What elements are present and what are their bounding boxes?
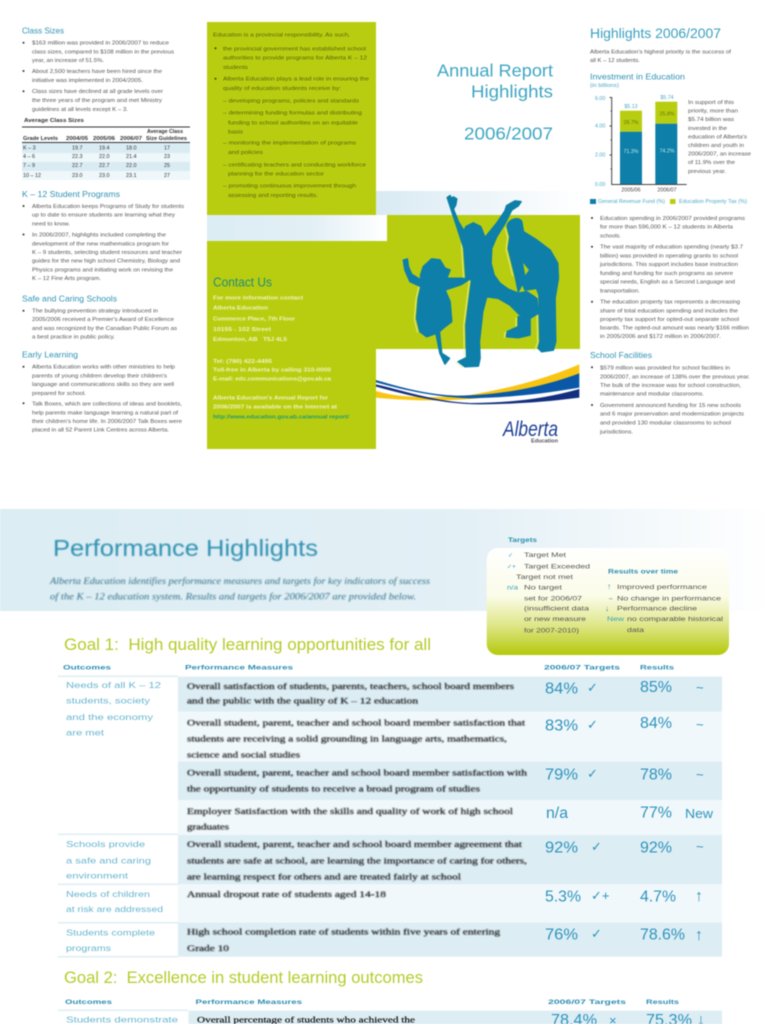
outcomes column: [66, 680, 163, 953]
panel: green responsibility box: basis: [228, 130, 243, 136]
text block: contact details: Alberta Education's Annual Report for: [213, 395, 328, 401]
text block: italic intro: Alberta Education identifies performance measures and targets for key indicators of success: [49, 576, 430, 587]
text block: class sizes bullets: About 2,500 teachers have been hired since the: [32, 69, 162, 75]
panel: green responsibility box: – promoting continuous improvement through: [223, 184, 356, 190]
title: Annual Report Highlights: 2006/2007: [464, 124, 553, 144]
panel: green responsibility box: students: [223, 65, 248, 71]
legend: targets and results over time: n/a: [507, 584, 519, 591]
targets and results values: ✓: [587, 766, 598, 781]
text block: chart commentary: 2006/2007, an increase: [688, 152, 751, 158]
text block: student programs bullets: Alberta Education keeps Programs of Study for students: [32, 204, 184, 210]
targets and results values: ↑: [695, 927, 703, 944]
heading: Goal 2: Goal 2: Excellence in student learning outcomes: [64, 968, 423, 987]
text block: class sizes bullets: Class sizes have declined at all grade levels over: [32, 89, 163, 95]
bar chart: investment in education: General Revenue Fund (%): [598, 199, 665, 205]
outcomes column: Schools provide: [66, 839, 145, 849]
illustration: swoosh: [376, 364, 579, 404]
table: goal 2 performance: Outcomes: [65, 999, 112, 1006]
text block: intro: Alberta Education's highest priority is the success of: [590, 50, 731, 56]
text block: spending bullets: funding and funding for such programs as severe: [600, 271, 733, 277]
outcomes column: at risk are addressed: [66, 904, 163, 914]
text block: contact details: 10155 - 102 Street: [213, 327, 271, 333]
measures column: Overall student, parent, teacher and school board member satisfaction with: [187, 768, 528, 778]
targets and results values: 84%: [640, 715, 672, 732]
legend: targets and results over time: data: [627, 627, 645, 634]
table: average class sizes: 22.7: [99, 163, 110, 169]
table: goal 1 performance: Outcomes: [63, 664, 111, 672]
table: goal 1 performance: Performance Measures: [185, 664, 293, 672]
text block: class sizes bullets: [22, 40, 174, 113]
text block: early learning bullets: their children's home life. In 2006/2007 Talk Boxes were: [32, 419, 182, 425]
table: average class sizes: 21.4: [126, 154, 136, 160]
text block: class sizes bullets: $163 million was provided in 2006/2007 to reduce: [32, 40, 169, 46]
title: Annual Report Highlights: Highlights: [471, 82, 553, 102]
panel: green responsibility box: funding to school authorities on an equitable: [228, 120, 358, 126]
text block: spending bullets: boards. The opted-out amount was nearly $166 million: [600, 326, 749, 332]
text block: spending bullets: share of total education spending and includes the: [600, 309, 738, 315]
text block: chart commentary: priority, more than: [688, 109, 738, 115]
bar chart: investment in education: (in billions): [590, 83, 619, 89]
measures column: Grade 10: [187, 943, 229, 953]
legend: targets and results over time: ↑: [607, 582, 611, 591]
legend: targets and results over time: set for 2006/07: [524, 595, 583, 602]
text block: spending bullets: for more than 596,000 K – 12 students in Alberta: [600, 224, 734, 230]
text block: safe schools bullet: a best practice in public policy.: [32, 334, 115, 340]
targets and results values: ~: [696, 839, 704, 854]
panel: green responsibility box: planning for the education sector: [228, 172, 324, 178]
outcomes column: a safe and caring: [66, 856, 151, 866]
measures column: Annual dropout rate of students aged 14-18: [187, 889, 386, 899]
measures column: graduates: [187, 822, 230, 832]
targets and results values: ✓: [591, 839, 602, 854]
text block: class sizes bullets: year, an increase of 51.5%.: [32, 58, 104, 64]
measures column: Overall student, parent, teacher and school board member satisfaction that: [187, 718, 526, 728]
targets and results values: 78%: [640, 766, 672, 784]
targets and results values: 79%: [545, 766, 578, 784]
targets and results values: ✓: [587, 680, 598, 695]
text block: class sizes bullets: the three years of the program and met Ministry: [32, 98, 162, 104]
legend: targets and results over time: Target Exceeded: [524, 564, 591, 571]
targets and results values: 4.7%: [640, 888, 676, 906]
table: average class sizes: 23.1: [126, 173, 136, 179]
table: average class sizes: 2004/05: [66, 136, 88, 142]
text block: school facilities bullets: maintenance and modular classrooms.: [600, 392, 704, 398]
text block: class sizes bullets: guidelines at all levels except K – 3.: [32, 107, 128, 113]
table: average class sizes: Grade Levels: [23, 136, 58, 142]
table: average class sizes: 18.0: [126, 146, 136, 152]
legend: targets and results over time: Targets: [508, 537, 538, 544]
legend: targets and results over time: –: [609, 596, 613, 603]
outcomes column: are met: [66, 727, 105, 737]
title: Annual Report Highlights: [437, 60, 553, 144]
measures column: students are receiving a solid grounding in language arts, mathematics,: [187, 733, 507, 743]
table: average class sizes: 27: [164, 173, 170, 179]
table: goal 1 performance: [58, 664, 722, 958]
outcomes column: Students complete: [66, 928, 155, 938]
table: goal 1 performance: 2006/07 Targets: [544, 664, 621, 672]
bar chart: investment in education: 6.00: [595, 96, 605, 102]
legend: targets and results over time: No change in performance: [617, 596, 722, 603]
bar chart: investment in education: Education Property Tax (%): [679, 199, 747, 205]
text block: spending bullets: billion) was provided in operating grants to school: [600, 254, 738, 260]
bar chart: investment in education: 4.00: [595, 124, 605, 130]
targets and results values: 92%: [545, 840, 578, 856]
targets and results values: ✓+: [591, 888, 609, 903]
legend: targets and results over time: Target Met: [524, 552, 566, 559]
panel: green responsibility box: [207, 22, 376, 215]
title: Annual Report Highlights: Annual Report: [437, 60, 553, 80]
bar chart: investment in education: [590, 83, 747, 205]
text block: intro: [590, 50, 731, 64]
table: average class sizes: 19.4: [99, 146, 110, 152]
panel: green responsibility box: the provincial government has established school: [223, 46, 366, 52]
text block: intro: all K – 12 students.: [590, 58, 640, 64]
text block: school facilities bullets: Government announced funding for 15 new schools: [600, 403, 741, 409]
text block: contact details: Alberta Education: [213, 306, 268, 312]
text block: contact details: Tel: (780) 422-4495: [213, 359, 272, 365]
text block: chart commentary: invested in the: [688, 126, 727, 132]
table: goal 2 performance: 2006/07 Targets: [548, 999, 627, 1006]
table: average class sizes: 2005/06: [93, 136, 115, 142]
outcomes column: Needs of all K – 12: [66, 680, 161, 690]
bar chart: investment in education: $5.74: [660, 95, 674, 101]
text block: student programs bullets: In 2006/2007, highlights included completing the: [32, 232, 166, 238]
text block: class sizes bullets: class sizes, compared to $108 million in the previous: [32, 50, 174, 56]
measures column: and the public with the quality of K – 12 education: [187, 696, 419, 706]
panel: green responsibility box: – certificating teachers and conducting workforce: [223, 162, 366, 168]
targets and results values: [545, 679, 714, 944]
text block: spending bullets: The vast majority of education spending (nearly $3.7: [600, 245, 743, 251]
text block: early learning bullets: Talk Boxes, which are collections of ideas and booklets,: [32, 401, 182, 407]
table: average class sizes: 2006/07: [120, 136, 142, 142]
text block: safe schools bullet: [22, 309, 177, 340]
text block: safe schools bullet: 2005/2006 received a Premier's Award of Excellence: [32, 317, 174, 323]
text block: italic intro: of the K – 12 education system. Results and targets for 2006/2007 are provided below.: [50, 592, 416, 602]
panel: green responsibility box: – determining funding formulas and distributing: [223, 111, 362, 117]
targets and results values: 77%: [640, 804, 672, 822]
text block: early learning bullets: help parents make language learning a natural part of: [32, 410, 178, 416]
outcomes column: environment: [66, 871, 129, 881]
legend: targets and results over time: New: [607, 616, 625, 623]
legend: targets and results over time: or new measure: [524, 616, 587, 623]
text block: early learning bullets: placed in all 52 Parent Link Centres across Alberta.: [32, 428, 169, 434]
table: average class sizes: 10 – 12: [23, 173, 41, 179]
text block: early learning bullets: Alberta Education works with other ministries to help: [32, 365, 175, 371]
legend: targets and results over time: ✓: [508, 552, 513, 559]
measures column: Overall satisfaction of students, parents, teachers, school board members: [187, 681, 515, 691]
legend: targets and results over time: (insufficient data: [524, 606, 590, 613]
bar chart: investment in education: 2005/06: [621, 187, 641, 193]
table: goal 2 performance: Performance Measures: [196, 999, 302, 1006]
heading: Highlights 2006/2007: Highlights 2006/2007: [590, 25, 721, 41]
text block: contact details: [213, 295, 350, 420]
heading: Performance Highlights: Performance Highlights: [53, 535, 318, 561]
text block: spending bullets: in 2005/2006 and $172 million in 2006/2007.: [600, 334, 721, 340]
panel: performance highlights header band: [0, 509, 768, 611]
text block: early learning bullets: prepared for school.: [32, 391, 86, 397]
text block: school facilities bullets: $579 million was provided for school facilities in: [600, 365, 730, 371]
text block: chart commentary: In support of this: [688, 100, 734, 106]
targets and results values: New: [685, 806, 714, 821]
targets and results values: ~: [696, 767, 704, 782]
text block: contact details: E-mail: edc.communications@gov.ab.ca: [213, 377, 331, 383]
panel: green responsibility box: quality of education students receive by:: [223, 86, 341, 92]
table: average class sizes: K – 3: [23, 146, 36, 152]
text block: chart commentary: children and youth in: [688, 143, 744, 149]
text block: school facilities bullets: The bulk of the increase was for school construction,: [600, 383, 741, 389]
table: average class sizes: 17: [164, 146, 170, 152]
text block: spending bullets: [591, 216, 749, 340]
text block: school facilities bullets: jurisdictions.: [599, 429, 633, 435]
text block: student programs bullets: [22, 204, 184, 282]
panel: green responsibility box: Education is a provincial responsibility. As such,: [213, 32, 350, 38]
text block: contact details: Commerce Place, 7th Floor: [213, 317, 295, 323]
panel: green responsibility box: Alberta Education plays a lead role in ensuring the: [223, 77, 369, 83]
targets and results values: 78.6%: [640, 926, 685, 944]
targets and results values: 5.3%: [545, 888, 581, 906]
text block: early learning bullets: parents of young children develop their children's: [32, 373, 167, 379]
legend: targets and results over time: ✓+: [507, 564, 516, 571]
text block: school facilities bullets: [591, 365, 750, 435]
text block: spending bullets: special needs, English as a Second Language and: [600, 279, 735, 285]
measures column: High school completion rate of students within five years of entering: [187, 927, 501, 937]
legend: targets and results over time: Results over time: [608, 569, 679, 576]
heading: Class Sizes: Class Sizes: [22, 26, 64, 36]
text block: contact details: Toll-free in Alberta by calling 310-0000: [213, 367, 331, 373]
targets and results values: n/a: [546, 805, 568, 822]
text block: spending bullets: property tax support for opted-out separate school: [600, 317, 739, 323]
text block: safe schools bullet: and was recognized by the Canadian Public Forum as: [32, 326, 177, 332]
legend: targets and results over time: No target: [524, 584, 562, 591]
text block: student programs bullets: K – 12 Fine Arts program.: [32, 276, 101, 282]
panel: green responsibility box: – monitoring the implementation of programs: [223, 141, 356, 147]
table: average class sizes: Average Class Sizes: [24, 118, 84, 124]
table: average class sizes: 19.7: [72, 146, 82, 152]
table: average class sizes: 7 – 9: [23, 163, 35, 169]
outcomes column: programs: [66, 943, 111, 953]
text block: school facilities bullets: and provided 130 modular classrooms to school: [600, 420, 731, 426]
targets and results values: 92%: [640, 840, 672, 856]
text block: early learning bullets: language and communications skills so they are well: [32, 382, 174, 388]
panel: green responsibility box: assessing and reporting results.: [228, 193, 318, 199]
measures column: are learning respect for others and are treated fairly at school: [187, 872, 462, 882]
panel: green responsibility box: authorities to provide programs for Alberta K – 12: [223, 56, 367, 62]
heading: Safe and Caring Schools: Safe and Caring Schools: [22, 294, 117, 304]
legend: targets and results over time: no comparable historical: [627, 616, 723, 623]
table: goal 2 performance: [58, 999, 722, 1024]
text block: contact details: For more information contact: [213, 295, 303, 301]
text block: chart commentary: [688, 100, 751, 175]
measures column: students are safe at school, are learning the importance of caring for others,: [187, 856, 527, 866]
text block: contact details: Edmonton, AB T5J 4L5: [213, 337, 287, 343]
bar chart: investment in education: 74.2%: [659, 148, 675, 154]
heading: Goal 1: Goal 1: High quality learning opportunities for all: [64, 635, 431, 654]
legend: targets and results over time: Improved performance: [617, 584, 708, 591]
table: average class sizes: [22, 118, 190, 180]
heading: K-12 Student Programs: K – 12 Student Programs: [22, 189, 120, 199]
panel: cover artwork and contact: [207, 191, 580, 449]
targets and results values: ~: [696, 680, 704, 695]
targets and results values: 76%: [545, 926, 578, 944]
text block: class sizes bullets: initiative was implemented in 2004/2005.: [32, 78, 143, 84]
outcomes column: and the economy: [66, 712, 154, 722]
text block: student programs bullets: development of the new mathematics program for: [32, 242, 169, 248]
text block: chart commentary: of 11.9% over the: [688, 160, 735, 166]
panel: class sizes and programs column: [22, 26, 190, 434]
table: average class sizes: Average Class: [147, 129, 183, 135]
text block: chart commentary: $5.74 billion was: [688, 117, 734, 123]
targets and results values: 85%: [640, 679, 672, 696]
outcomes column: Needs of children: [66, 889, 150, 899]
measures column: Employer Satisfaction with the skills and quality of work of high school: [187, 806, 514, 816]
targets and results values: ✓: [587, 717, 598, 732]
text block: chart commentary: education of Alberta's: [688, 135, 747, 141]
bar chart: investment in education: 2.00: [595, 153, 605, 159]
measures column: Overall student, parent, teacher and school board member agreement that: [187, 839, 523, 849]
panel: green responsibility box: and policies: [228, 150, 263, 156]
text block: spending bullets: transportation.: [600, 288, 640, 294]
measures column: science and social studies: [187, 749, 301, 759]
text block: contact details: 2006/2007 is available on the Internet at: [213, 405, 337, 411]
heading: Early Learning: Early Learning: [22, 350, 78, 360]
table: average class sizes: 22.7: [72, 163, 82, 169]
text block: early learning bullets: [22, 365, 182, 434]
panel: green responsibility box: – developing programs, policies and standards: [223, 99, 359, 105]
text block: contact details: http://www.education.gov.ab.ca/annual report/: [213, 414, 350, 420]
text block: school facilities bullets: 2006/2007, an increase of 138% over the previous year.: [600, 374, 750, 380]
text block: italic intro: [49, 576, 430, 602]
bar chart: investment in education: 71.3%: [623, 149, 639, 155]
text block: spending bullets: The education property tax represents a decreasing: [600, 300, 740, 306]
table: average class sizes: 22.3: [72, 154, 82, 160]
text block: student programs bullets: need to know.: [32, 221, 70, 227]
table: average class sizes: 4 – 6: [23, 154, 35, 160]
measures column: the opportunity of students to receive a broad program of studies: [187, 783, 481, 793]
targets and results values: ✓: [591, 926, 602, 941]
bar chart: investment in education: $5.13: [624, 104, 638, 110]
text block: school facilities bullets: and 6 major preservation and modernization projects: [600, 412, 744, 418]
text block: safe schools bullet: The bullying prevention strategy introduced in: [32, 309, 158, 315]
illustration: family silhouette: [403, 196, 558, 368]
table: average class sizes: Size Guidelines: [146, 136, 187, 142]
text block: student programs bullets: K – 9 students, selecting student resources and teacher: [32, 250, 182, 256]
bar chart: investment in education: 0.00: [595, 182, 605, 188]
heading: Contact Us: Contact Us: [213, 274, 272, 290]
bar chart: investment in education: 25.8%: [659, 112, 675, 118]
legend: targets and results over time: ↓: [605, 604, 609, 613]
targets and results values: ↑: [695, 888, 703, 905]
table: average class sizes: 23.0: [99, 173, 110, 179]
table: goal 2 performance: Results: [646, 999, 679, 1006]
legend: targets and results over time: for 2007-2010): [524, 627, 579, 634]
targets and results values: ~: [696, 717, 704, 732]
bar chart: investment in education: 2006/07: [657, 187, 677, 193]
panel: highlights column: [590, 25, 751, 435]
targets and results values: 83%: [545, 718, 578, 734]
measures column: [187, 681, 528, 953]
table: average class sizes: 25: [164, 163, 170, 169]
table: goal 1 performance: Results: [640, 664, 674, 672]
targets and results values: 84%: [545, 680, 578, 698]
text block: chart commentary: previous year.: [688, 169, 726, 175]
legend: targets and results over time: Target not met: [516, 574, 573, 581]
heading: School Facilities: School Facilities: [590, 350, 652, 360]
logo: Alberta Education: Alberta: [501, 418, 558, 441]
heading: Investment in Education: Investment in Education: [590, 72, 685, 82]
table: average class sizes: 22.0: [126, 163, 136, 169]
table: average class sizes: 22.0: [99, 154, 110, 160]
legend: targets and results over time: [487, 537, 729, 655]
legend: targets and results over time: Performance decline: [617, 606, 698, 613]
text block: spending bullets: schools.: [600, 233, 621, 239]
text block: student programs bullets: guides for the new high school Chemistry, Biology and: [32, 259, 180, 265]
text block: spending bullets: Education spending in 2006/2007 provided programs: [600, 216, 745, 222]
table: average class sizes: 23.0: [72, 173, 82, 179]
text block: student programs bullets: up to date to ensure students are learning what they: [32, 213, 175, 219]
logo: Alberta Education: Education: [531, 438, 558, 444]
text block: spending bullets: jurisdictions. This support includes base instruction: [599, 262, 738, 268]
outcomes column: students, society: [66, 696, 151, 706]
table: average class sizes: 23: [164, 154, 170, 160]
text block: student programs bullets: Physics programs and initiating work on revising the: [32, 267, 173, 273]
bar chart: investment in education: 28.7%: [623, 120, 639, 126]
